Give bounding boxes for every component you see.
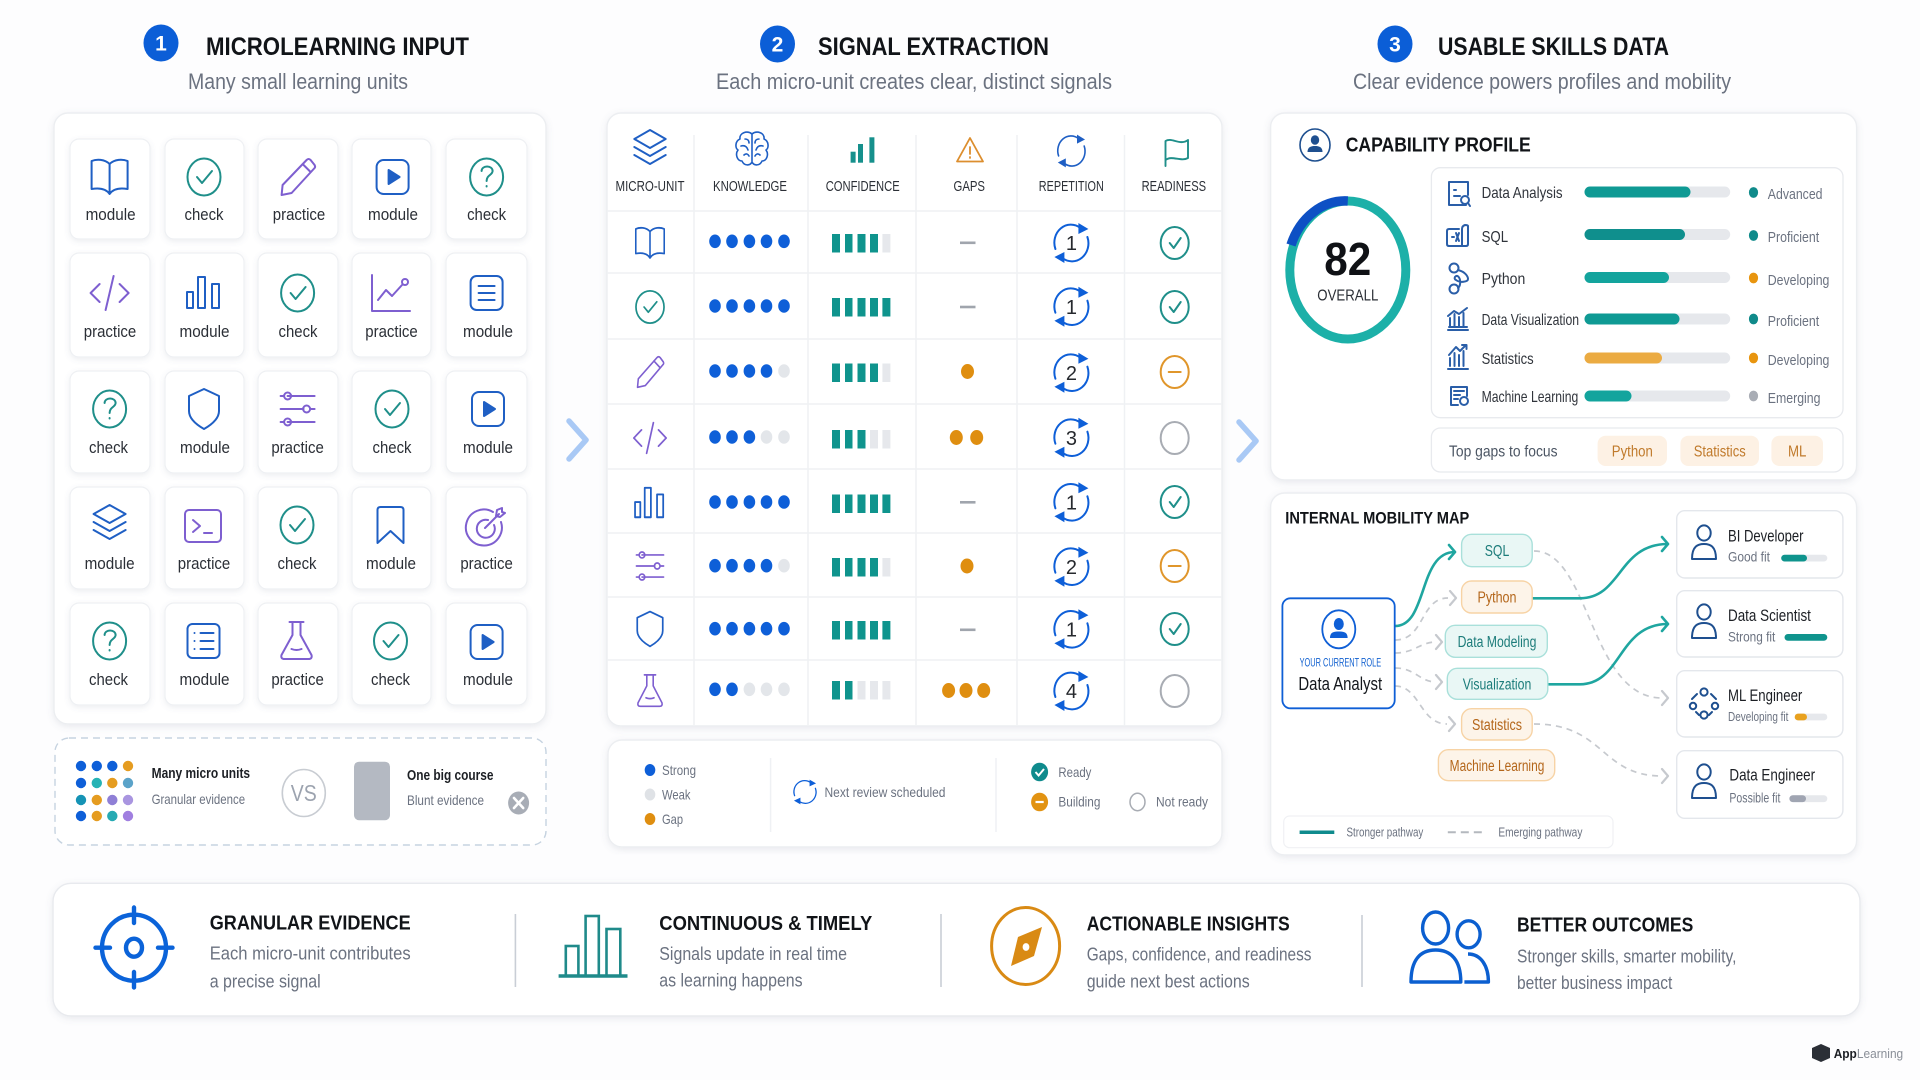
skill: python: Developing [1768, 273, 1829, 289]
skill node: statistics [1462, 709, 1532, 740]
skill: machine learning: Emerging [1768, 391, 1820, 407]
tile: practice target [446, 487, 527, 589]
tile: check: check [184, 205, 224, 224]
skill: statistics [1448, 345, 1829, 369]
tile: check question: check [89, 438, 128, 457]
panel: many micro units versus one big course [55, 738, 546, 845]
tile: check [258, 487, 338, 589]
heading: step 1 microlearning input: 1 [155, 32, 167, 56]
legend: pathway key: Emerging pathway [1498, 825, 1583, 840]
text: one big course: One big course [407, 768, 494, 784]
row 2: check [636, 287, 1189, 327]
heading: step 2 signal extraction: SIGNAL EXTRACTION [818, 33, 1049, 61]
skill node: machine learning [1438, 750, 1555, 781]
benefit: granular evidence: a precise signal [210, 971, 321, 991]
skill: machine learning [1451, 387, 1820, 407]
column header: gaps: GAPS [954, 178, 985, 195]
tile: practice flask [258, 603, 338, 705]
role card: ml engineer [1677, 671, 1843, 737]
tile: practice sliders: practice [271, 438, 324, 457]
skill node: statistics: Statistics [1472, 717, 1522, 734]
tile: check question [446, 139, 527, 239]
legend: strength key: Strong [662, 762, 696, 778]
tile: practice sliders [258, 371, 338, 473]
tile: check [352, 371, 431, 473]
icon: profile person [1300, 129, 1330, 161]
ring: overall score 82: 82 [1324, 233, 1371, 285]
row 7: shield: 1 [1066, 620, 1077, 642]
dot grid: micro units [76, 761, 133, 821]
legend: strength key: Gap [662, 811, 683, 827]
arrow: extraction to skills data [1239, 422, 1256, 460]
row 8: flask [638, 671, 1189, 711]
panel: top gaps to focus [1431, 428, 1843, 472]
heading: step 1 microlearning input [144, 24, 469, 94]
benefit: continuous and timely [559, 912, 873, 991]
panel: capability profile [1271, 113, 1857, 480]
role card: data engineer [1677, 751, 1843, 818]
logo: applearning [1812, 1044, 1903, 1062]
pill: python: Python [1612, 444, 1653, 461]
heading: internal mobility map: INTERNAL MOBILITY MAP [1285, 508, 1469, 527]
legend: readiness key: Ready [1058, 764, 1091, 780]
legend: next review [794, 780, 946, 804]
pill: ml: ML [1788, 444, 1806, 461]
panel: top gaps to focus: Top gaps to focus [1449, 444, 1558, 461]
tile: module bookmark: module [366, 554, 416, 573]
row 4: code: 3 [1066, 428, 1077, 450]
tile: module bars [165, 253, 244, 357]
heading: step 2 signal extraction: 2 [772, 34, 783, 56]
heading: step 3 usable skills data: USABLE SKILLS DATA [1438, 33, 1669, 61]
panel: outcomes band [53, 883, 1860, 1016]
node: current role data analyst [1282, 598, 1395, 708]
tile: check: check [278, 554, 317, 573]
tile: check question [70, 371, 150, 473]
column header: readiness: READINESS [1142, 178, 1206, 195]
legend: readiness key: Not ready [1156, 794, 1208, 810]
role card: data engineer: Data Engineer [1729, 766, 1815, 785]
heading: step 2 signal extraction: Each micro-unit creates clear, distinct signals [716, 69, 1112, 94]
tile: check question: check [89, 670, 128, 689]
skill: sql: Proficient [1768, 230, 1819, 246]
pill: statistics: Statistics [1694, 444, 1746, 461]
column header: micro-unit [616, 130, 684, 195]
tile: check question: check [467, 205, 507, 224]
skill: data visualization [1448, 308, 1819, 330]
tile: module play [446, 371, 527, 473]
skill node: data modeling [1445, 625, 1547, 657]
heading: step 1 microlearning input: MICROLEARNING INPUT [206, 33, 469, 61]
big course block [354, 762, 390, 820]
tile: module play: module [463, 438, 513, 457]
benefit: continuous and timely: as learning happens [659, 971, 803, 991]
icon: target crosshair [96, 908, 172, 988]
icon: people [1411, 912, 1488, 982]
benefit: actionable insights: ACTIONABLE INSIGHTS [1087, 913, 1290, 936]
role card: data scientist: Strong fit [1728, 629, 1775, 645]
benefit: granular evidence [96, 908, 411, 991]
legend: next review: Next review scheduled [824, 784, 946, 800]
tile: practice terminal [165, 487, 244, 589]
skill node: visualization: Visualization [1463, 676, 1531, 694]
skill: python [1450, 264, 1829, 294]
column header: repetition: REPETITION [1039, 178, 1104, 195]
column header: gaps [954, 138, 985, 195]
skill node: sql [1462, 534, 1532, 567]
tile: check: check [372, 438, 412, 457]
role card: ml engineer: ML Engineer [1728, 686, 1803, 705]
benefit: better outcomes: better business impact [1517, 973, 1672, 993]
tile: check [352, 603, 431, 705]
skill: statistics: Statistics [1482, 351, 1534, 368]
tile: module shield: module [180, 438, 230, 457]
row 6: sliders [636, 547, 1189, 587]
text: many micro units [152, 766, 250, 807]
panel: internal mobility map [1271, 493, 1857, 855]
tile: practice flask: practice [271, 670, 324, 689]
legend: pathway key: Stronger pathway [1346, 825, 1424, 840]
panel: microlearning unit grid [54, 113, 546, 724]
tile: module book [70, 139, 150, 239]
skill node: visualization [1447, 668, 1548, 699]
versus badge: VS [291, 780, 317, 806]
column header: repetition [1039, 135, 1104, 195]
skill: sql [1447, 225, 1819, 246]
role card: data scientist: Data Scientist [1728, 606, 1811, 625]
role card: data scientist [1677, 591, 1843, 657]
benefit: granular evidence: GRANULAR EVIDENCE [210, 911, 411, 934]
logo: applearning: AppLearning [1834, 1046, 1903, 1061]
skill: data analysis: Advanced [1768, 187, 1822, 203]
skill node: python [1462, 581, 1532, 613]
panel: skill levels [1431, 168, 1843, 418]
column header: confidence: CONFIDENCE [826, 178, 900, 195]
row 5: bars [635, 482, 1189, 522]
benefit: better outcomes [1411, 912, 1736, 993]
panel: signal legend [608, 740, 1222, 847]
tile: module layers: module [85, 554, 135, 573]
tile: module play [352, 139, 431, 239]
node: current role data analyst: YOUR CURRENT ROLE [1300, 658, 1381, 670]
tile: practice code: practice [84, 322, 136, 341]
heading: step 3 usable skills data: 3 [1389, 34, 1401, 56]
text: many micro units: Granular evidence [152, 791, 245, 807]
pathways: dashed emerging routes [1395, 551, 1668, 783]
legend: strength key: Weak [662, 786, 691, 802]
skill: data analysis: Data Analysis [1482, 185, 1563, 202]
tile: practice pencil: practice [273, 205, 325, 224]
versus badge [282, 770, 325, 816]
tile: module play: module [368, 205, 418, 224]
text: many micro units: Many micro units [152, 766, 250, 782]
row 1: book [636, 223, 1189, 263]
tile: module play [446, 603, 527, 705]
tile: check [258, 253, 338, 357]
tile: check: check [371, 670, 410, 689]
benefit: better outcomes: BETTER OUTCOMES [1517, 914, 1693, 937]
tile: module layers [70, 487, 150, 589]
row 7: shield [637, 609, 1189, 649]
row 5: bars: 1 [1066, 492, 1077, 514]
row 3: pencil [638, 353, 1189, 393]
benefit: actionable insights: Gaps, confidence, and readiness [1087, 945, 1312, 965]
column header: knowledge: KNOWLEDGE [713, 178, 787, 195]
tile: practice line chart: practice [365, 322, 418, 341]
ring: overall score 82: OVERALL [1317, 288, 1378, 305]
role card: data engineer: Possible fit [1729, 790, 1780, 806]
icon: reject x [508, 792, 529, 814]
role card: ml engineer: Developing fit [1728, 709, 1789, 724]
skill: statistics: Developing [1768, 353, 1829, 369]
skill: machine learning: Machine Learning [1482, 389, 1578, 406]
tile: module document [446, 253, 527, 357]
pathways: strong teal routes [1395, 537, 1668, 684]
skill: python: Python [1482, 271, 1525, 288]
skill node: data modeling: Data Modeling [1458, 634, 1536, 651]
heading: step 1 microlearning input: Many small learning units [188, 69, 408, 94]
row 4: code [634, 418, 1189, 458]
text: one big course [407, 768, 494, 808]
tile: module document: module [463, 322, 513, 341]
pill: python [1598, 436, 1667, 466]
skill: data analysis [1449, 182, 1822, 206]
tile: practice terminal: practice [178, 554, 230, 573]
benefit: continuous and timely: Signals update in real time [659, 944, 847, 964]
tile: module book: module [86, 205, 136, 224]
legend: readiness key: Building [1058, 794, 1100, 810]
tile: practice target: practice [460, 554, 513, 573]
tile: module bookmark [352, 487, 431, 589]
row 1: book: 1 [1066, 233, 1077, 255]
role card: bi developer [1677, 511, 1843, 578]
tile: check: check [278, 322, 318, 341]
tile: check [165, 139, 244, 239]
skill: sql: SQL [1482, 229, 1508, 246]
heading: step 3 usable skills data: Clear evidence powers profiles and mobility [1353, 69, 1731, 94]
row 8: flask: 4 [1066, 681, 1077, 703]
benefit: actionable insights: guide next best actions [1087, 971, 1250, 991]
role card: bi developer: Good fit [1728, 549, 1770, 565]
tile: check question [70, 603, 150, 705]
tile: module list: module [180, 670, 230, 689]
column header: confidence [826, 137, 900, 195]
icon: compass [992, 908, 1060, 984]
icon: bar chart [559, 916, 628, 976]
column header: knowledge [713, 132, 787, 195]
pill: statistics [1680, 436, 1759, 466]
skill node: machine learning: Machine Learning [1450, 758, 1544, 775]
heading: capability profile: CAPABILITY PROFILE [1346, 135, 1531, 157]
row 3: pencil: 2 [1066, 363, 1077, 385]
tile: practice line chart [352, 253, 431, 357]
benefit: actionable insights [992, 908, 1312, 991]
legend: readiness key [1031, 763, 1208, 811]
column header: micro-unit: MICRO-UNIT [616, 178, 684, 195]
legend: strength key [645, 762, 696, 827]
row 6: sliders: 2 [1066, 557, 1077, 579]
column header: readiness [1142, 140, 1206, 195]
heading: step 2 signal extraction [716, 26, 1112, 94]
tile: practice code [70, 253, 150, 357]
ring: overall score 82 [1290, 201, 1406, 339]
skill: data visualization: Proficient [1768, 314, 1819, 330]
tile: practice pencil [258, 139, 338, 239]
benefit: continuous and timely: CONTINUOUS & TIMELY [659, 912, 873, 935]
tile: module list [165, 603, 244, 705]
skill node: python: Python [1478, 590, 1516, 606]
skill node: sql: SQL [1485, 543, 1510, 560]
heading: step 3 usable skills data [1353, 26, 1731, 94]
panel: signal table [607, 113, 1222, 726]
benefit: better outcomes: Stronger skills, smarter mobility, [1517, 946, 1736, 966]
tile: module shield [165, 371, 244, 473]
row 2: check: 1 [1066, 297, 1077, 319]
arrow: input to extraction [569, 421, 586, 459]
text: one big course: Blunt evidence [407, 792, 484, 808]
benefit: granular evidence: Each micro-unit contributes [210, 943, 411, 963]
role card: bi developer: BI Developer [1728, 527, 1804, 546]
node: current role data analyst: Data Analyst [1298, 674, 1382, 694]
tile: module play: module [463, 670, 513, 689]
pill: ml [1771, 436, 1823, 466]
legend: pathway key [1284, 816, 1613, 848]
skill: data visualization: Data Visualization [1482, 312, 1579, 329]
tile: module bars: module [180, 322, 230, 341]
